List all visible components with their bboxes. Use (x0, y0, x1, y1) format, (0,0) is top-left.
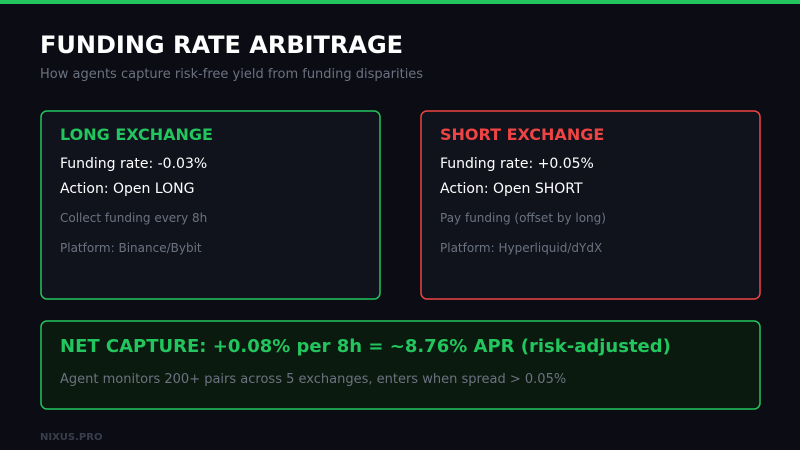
panel: short exchange (421, 111, 760, 299)
panel: long exchange: Platform: Binance/Bybit (60, 241, 202, 255)
panel: short exchange: Funding rate: +0.05% (440, 156, 594, 172)
panel: long exchange: Action: Open LONG (60, 181, 194, 197)
footer brand: NIXUS.PRO (40, 432, 102, 443)
panel: short exchange: Pay funding (offset by long) (440, 211, 606, 225)
panel: short exchange: Platform: Hyperliquid/dYdX (440, 241, 602, 255)
panel: long exchange (41, 111, 380, 299)
panel: short exchange: Action: Open SHORT (440, 181, 583, 197)
subtitle: How agents capture risk-free yield from funding disparities (40, 67, 423, 82)
panel: long exchange: Collect funding every 8h (60, 211, 207, 225)
panel: long exchange: LONG EXCHANGE (60, 125, 213, 144)
title: FUNDING RATE ARBITRAGE (40, 31, 403, 59)
panel: short exchange: SHORT EXCHANGE (440, 125, 604, 144)
panel: long exchange: Funding rate: -0.03% (60, 156, 207, 172)
panel: net capture: NET CAPTURE: +0.08% per 8h = ~8.76% APR (risk-adjusted) (60, 336, 671, 357)
top accent bar (0, 0, 800, 4)
panel: net capture: Agent monitors 200+ pairs across 5 exchanges, enters when spread > 0.05% (60, 372, 566, 387)
panel: net capture (41, 321, 760, 409)
